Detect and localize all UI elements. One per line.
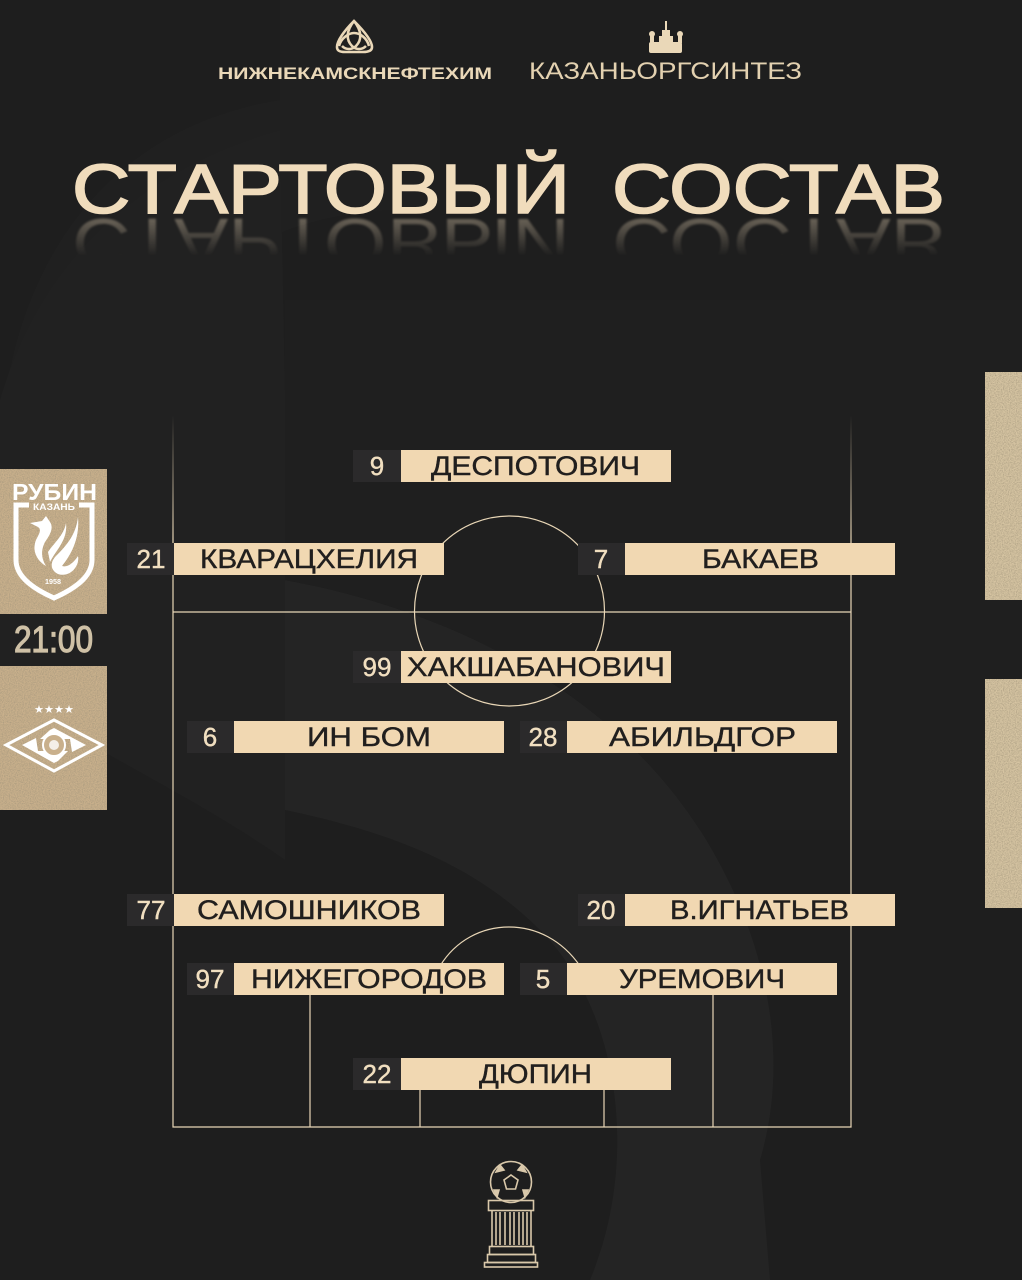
title reflection: СТАРТОВЫЙ: [72, 204, 570, 283]
player lineup: [127, 450, 895, 1090]
player: Despotovic: 9: [370, 451, 384, 481]
player: V. Ignatiev: [578, 894, 895, 926]
player: Uremovich: 5: [536, 964, 550, 994]
Rubin city: КАЗАНЬ: [33, 502, 76, 512]
right edge panels: [985, 372, 1022, 908]
player: Nizhegorodov: НИЖЕГОРОДОВ: [251, 964, 487, 994]
title text: [72, 149, 945, 228]
player: V. Ignatiev: В.ИГНАТЬЕВ: [670, 895, 849, 925]
player: In Bom: ИН БОМ: [307, 722, 431, 752]
Rubin year: 1958: [45, 579, 61, 586]
kickoff time: 21:00: [14, 619, 93, 660]
player: Khakshabanovich: [353, 651, 671, 683]
title reflection: [76, 217, 942, 252]
player: Khakshabanovich: 99: [363, 652, 391, 682]
player: Bakaev: 7: [594, 544, 608, 574]
player: Nizhegorodov: 97: [196, 964, 224, 994]
player: V. Ignatiev: 20: [587, 895, 615, 925]
player: Uremovich: УРЕМОВИЧ: [619, 964, 785, 994]
player: In Bom: [187, 721, 504, 753]
sponsor name: Nizhnekamskneftekhim: НИЖНЕКАМСКНЕФТЕХИМ: [218, 64, 492, 83]
match info: [0, 469, 107, 810]
title: [75, 149, 942, 252]
icon: triquetra knot: [337, 21, 372, 52]
icon: ball on pedestal: [484, 1162, 538, 1267]
icon: Kazanorgsintez building: [649, 21, 683, 53]
player: Samoshnikov: [127, 894, 444, 926]
player: Samoshnikov: САМОШНИКОВ: [197, 895, 421, 925]
Spartak stars: ★★★★: [34, 704, 74, 716]
player: Nizhegorodov: [187, 963, 504, 995]
player: Despotovic: ДЕСПОТОВИЧ: [431, 451, 640, 481]
icon: Spartak diamond: [6, 720, 102, 771]
player: Dyupin: ДЮПИН: [479, 1059, 592, 1089]
player: Khakshabanovich: ХАКШАБАНОВИЧ: [407, 652, 665, 682]
player: Bakaev: БАКАЕВ: [702, 544, 819, 574]
player: Abildgor: АБИЛЬДГОР: [609, 722, 796, 752]
player: Kvaratskhelia: [127, 543, 444, 575]
panel: Rubin badge: [0, 469, 107, 614]
player: Samoshnikov: 77: [137, 895, 165, 925]
sponsor logos: [218, 21, 802, 85]
panel: right lower: [985, 679, 1022, 908]
player: Despotovic: [353, 450, 671, 482]
Rubin wordmark: РУБИН: [12, 479, 97, 505]
panel: Spartak badge: [0, 666, 107, 810]
player: Uremovich: [520, 963, 837, 995]
player: Bakaev: [578, 543, 895, 575]
player: In Bom: 6: [203, 722, 217, 752]
panel: right upper: [985, 372, 1022, 600]
player: Abildgor: 28: [529, 722, 557, 752]
football pitch lines: [173, 415, 851, 1127]
player: Dyupin: [353, 1058, 671, 1090]
title reflection: СОСТАВ: [612, 204, 945, 282]
player: Dyupin: 22: [363, 1059, 391, 1089]
icon: Rubin shield: [16, 505, 92, 598]
sponsor name: Kazanorgsintez: КАЗАНЬОРГСИНТЕЗ: [529, 58, 802, 85]
player: Kvaratskhelia: КВАРАЦХЕЛИЯ: [200, 544, 418, 574]
player: Kvaratskhelia: 21: [137, 544, 165, 574]
player: Abildgor: [520, 721, 837, 753]
title text: СОСТАВ: [612, 150, 945, 228]
title text: СТАРТОВЫЙ: [72, 149, 570, 228]
